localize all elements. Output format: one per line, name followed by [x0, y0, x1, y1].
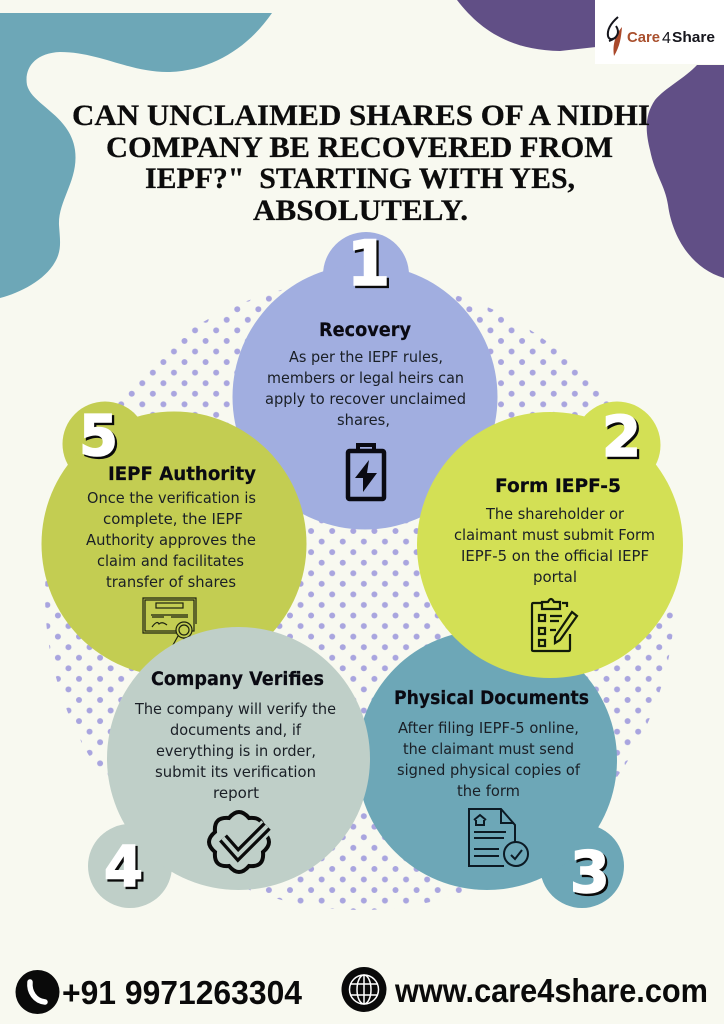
- body text: Company Verifies: documents and, if: [170, 721, 302, 739]
- icon: globe: [342, 967, 386, 1012]
- body text: IEPF Authority: claim and facilitates: [97, 552, 244, 570]
- body text: Company Verifies: report: [213, 784, 259, 802]
- heading: Company Verifies: Company Verifies: [151, 668, 324, 690]
- panel: step 2 Form IEPF-5: [417, 402, 683, 678]
- body text: IEPF Authority: [86, 489, 256, 591]
- body text: Form IEPF-5: [454, 505, 655, 586]
- icon: verified badge: [209, 812, 269, 872]
- contact: phone: [16, 970, 303, 1014]
- website address: www.care4share.com: [394, 972, 708, 1009]
- body text: Physical Documents: After filing IEPF-5 online,: [398, 719, 579, 737]
- body text: Company Verifies: submit its verification: [155, 763, 316, 781]
- phone number: +91 9971263304: [62, 974, 303, 1011]
- panel: step 1 Recovery: [232, 227, 498, 530]
- number 4: 4: [106, 837, 145, 902]
- number 2: 2: [604, 407, 643, 472]
- icon: document with check: [469, 809, 528, 866]
- decorative purple blob top: [457, 0, 596, 51]
- body text: Form IEPF-5: portal: [533, 568, 577, 586]
- heading: Recovery: Recovery: [319, 319, 412, 341]
- decorative teal blob top left: [0, 13, 272, 298]
- icon: clipboard checklist: [532, 599, 577, 651]
- number 5: 5: [81, 406, 120, 471]
- number 3: 3: [572, 842, 612, 908]
- dotted background circle: [45, 280, 675, 910]
- title: ABSOLUTELY.: [253, 195, 468, 227]
- heading: IEPF Authority: IEPF Authority: [108, 463, 257, 485]
- number 4: 4: [104, 835, 143, 900]
- title: IEPF?" STARTING WITH YES,: [145, 163, 575, 195]
- body text: Company Verifies: everything is in order,: [156, 742, 316, 760]
- body text: Physical Documents: the claimant must send: [403, 740, 574, 758]
- body text: Physical Documents: the form: [457, 782, 520, 800]
- body text: Company Verifies: [134, 700, 336, 802]
- body text: IEPF Authority: complete, the IEPF: [103, 510, 243, 528]
- body text: Physical Documents: signed physical copies of: [397, 761, 581, 779]
- number 5: 5: [79, 404, 118, 469]
- decorative purple blob right: [647, 65, 724, 278]
- logo: Care 4 Share: [595, 0, 724, 64]
- body text: Recovery: As per the IEPF rules,: [289, 348, 443, 366]
- number 1: 1: [347, 227, 390, 300]
- icon: phone: [16, 970, 60, 1014]
- panel: step 4 Company Verifies: [88, 627, 370, 908]
- heading: Form IEPF-5: Form IEPF-5: [495, 475, 621, 497]
- body text: Form IEPF-5: claimant must submit Form: [454, 526, 655, 544]
- body text: IEPF Authority: Authority approves the: [86, 531, 256, 549]
- body text: Recovery: [265, 348, 466, 429]
- body text: Form IEPF-5: The shareholder or: [485, 505, 625, 523]
- number 3: 3: [570, 840, 610, 906]
- logo: Care 4 Share: Care: [627, 29, 660, 46]
- icon: certificate: [143, 598, 196, 647]
- contact: website: [342, 967, 708, 1012]
- panel: step 5 IEPF Authority: [42, 402, 306, 676]
- icon: battery: [348, 445, 384, 499]
- number 1: 1: [349, 229, 392, 302]
- heading: Physical Documents: Physical Documents: [394, 687, 589, 709]
- body text: Form IEPF-5: IEPF-5 on the official IEPF: [461, 547, 649, 565]
- body text: Company Verifies: The company will verify the: [134, 700, 336, 718]
- body text: Physical Documents: [397, 719, 581, 800]
- logo: Care 4 Share: 4: [662, 30, 671, 47]
- body text: IEPF Authority: transfer of shares: [106, 573, 236, 591]
- number 2: 2: [602, 405, 641, 470]
- body text: Recovery: shares,: [337, 411, 390, 429]
- title: [72, 100, 650, 227]
- body text: Recovery: members or legal heirs can: [267, 369, 464, 387]
- logo: Care 4 Share: Share: [672, 29, 715, 46]
- title: COMPANY BE RECOVERED FROM: [106, 132, 613, 164]
- body text: IEPF Authority: Once the verification is: [87, 489, 256, 507]
- body text: Recovery: apply to recover unclaimed: [265, 390, 466, 408]
- title: CAN UNCLAIMED SHARES OF A NIDHI: [72, 100, 650, 132]
- panel: step 3 Physical Documents: [357, 630, 624, 908]
